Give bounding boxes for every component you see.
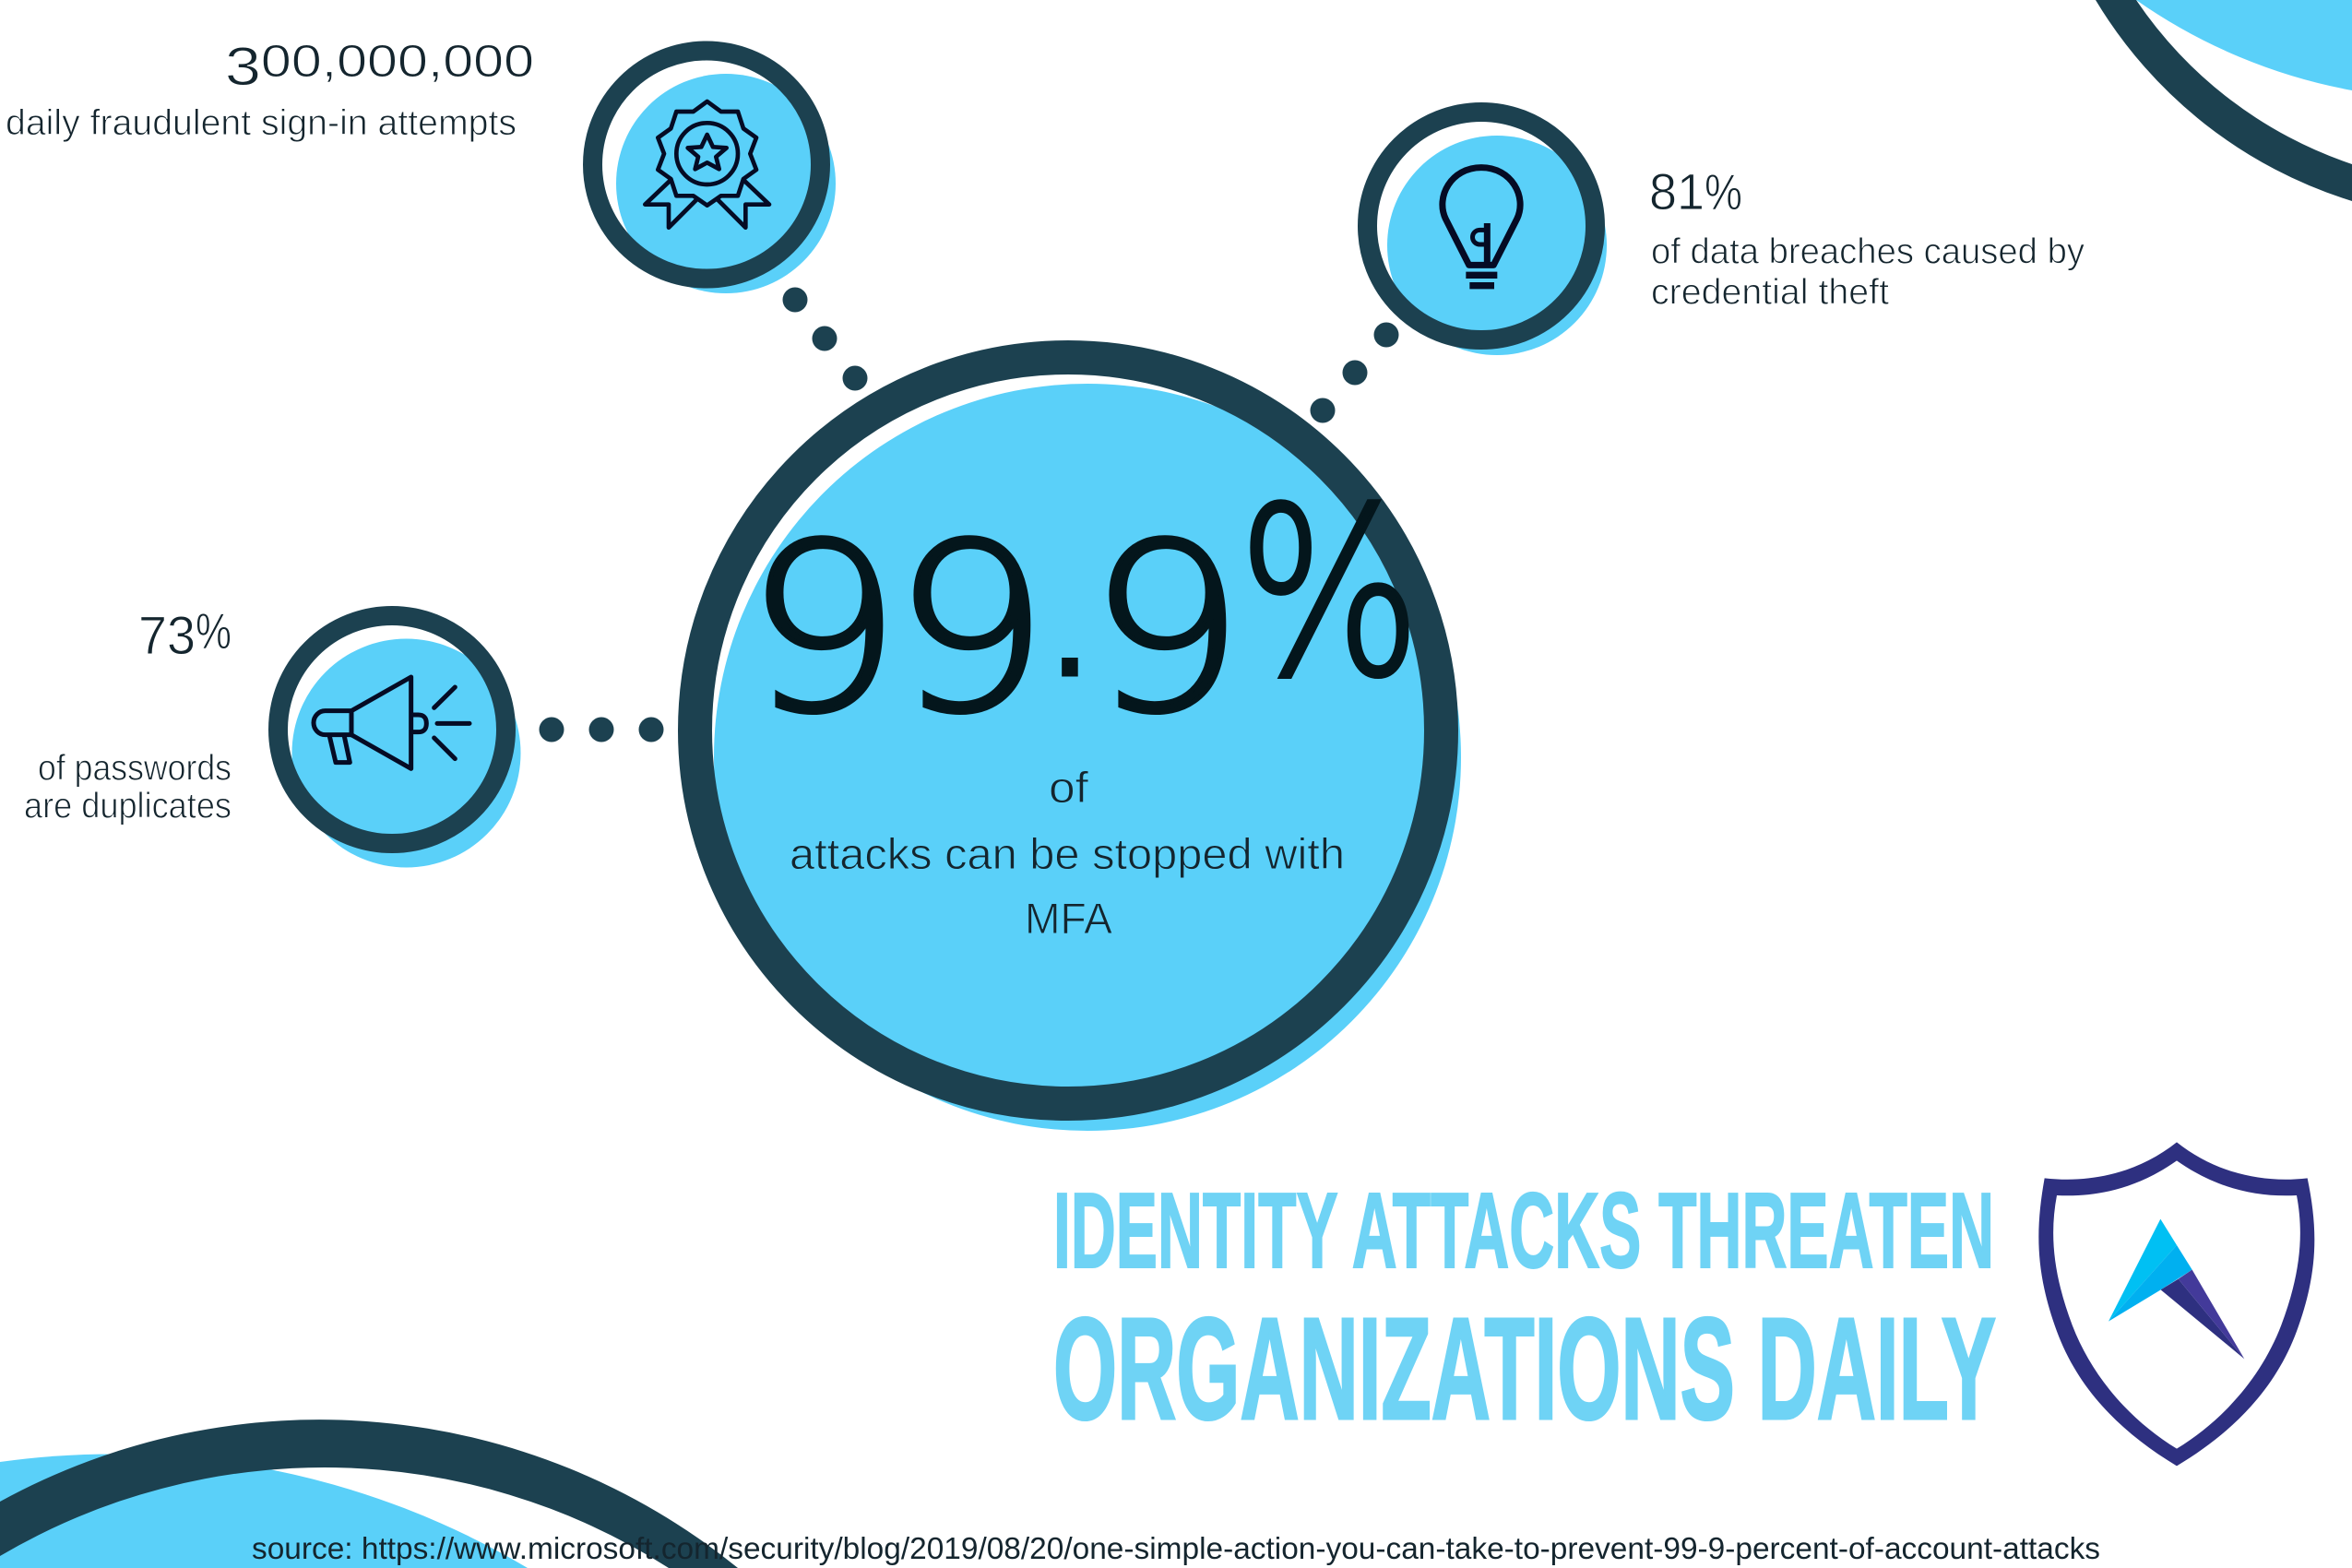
logo: shield xyxy=(2038,1142,2314,1466)
main circle caption: attacks can be stopped with xyxy=(790,829,1345,878)
big stat: 99.9%: . xyxy=(1033,460,1107,730)
title xyxy=(1053,1170,1996,1450)
main circle caption: of xyxy=(1049,763,1089,812)
main circle caption: MFA xyxy=(1025,894,1113,943)
big stat: 99.9%: 9 xyxy=(892,495,1050,765)
corner decoration: bottom left xyxy=(0,1420,738,1568)
icon: light bulb xyxy=(1367,113,1607,355)
stat: 81% of data breaches caused by credential theft xyxy=(1649,162,2085,312)
stat: 73% of passwords are duplicates: of passwords xyxy=(38,749,232,788)
stat: 73% of passwords are duplicates xyxy=(24,602,232,826)
stat: 300,000,000 daily fraudulent sign-in attempts xyxy=(6,37,534,143)
stat: 73% of passwords are duplicates: % xyxy=(196,602,232,659)
big stat: 99.9%: 9 xyxy=(744,495,902,765)
stat: 300,000,000 daily fraudulent sign-in attempts: daily fraudulent sign-in attempts xyxy=(6,103,517,143)
stat: 300,000,000 daily fraudulent sign-in attempts: 00,000,000 xyxy=(261,37,534,87)
icon: megaphone xyxy=(279,616,520,867)
stat: 81% of data breaches caused by credential theft: credential theft xyxy=(1651,273,1889,312)
connector dots: top right icon xyxy=(1310,323,1398,422)
stat: 73% of passwords are duplicates: are duplicates xyxy=(24,786,232,826)
big stat: 99.9% xyxy=(744,459,1421,765)
source line: source: https://www.microsoft.com/security/blog/2019/08/20/one-simple-action-you-can-take-to-prevent-99-9-percent-of-account-attacks xyxy=(252,1531,2100,1565)
big stat: 99.9%: 9 xyxy=(1087,495,1245,765)
stat: 81% of data breaches caused by credential theft: % xyxy=(1705,163,1742,220)
big stat: 99.9%: % xyxy=(1238,459,1421,729)
connector dots: left icon xyxy=(539,718,664,742)
main circle caption xyxy=(790,763,1345,943)
corner decoration: top right xyxy=(2096,0,2352,201)
connector dots: top left icon xyxy=(782,288,867,391)
main circle xyxy=(695,358,1461,1131)
stat: 73% of passwords are duplicates: 73 xyxy=(138,606,196,666)
stat: 81% of data breaches caused by credential theft: 81 xyxy=(1649,162,1705,220)
icon: medal badge xyxy=(592,51,836,293)
stat: 81% of data breaches caused by credential theft: of data breaches caused by xyxy=(1651,232,2085,271)
stat: 300,000,000 daily fraudulent sign-in attempts: 3 xyxy=(225,37,261,97)
